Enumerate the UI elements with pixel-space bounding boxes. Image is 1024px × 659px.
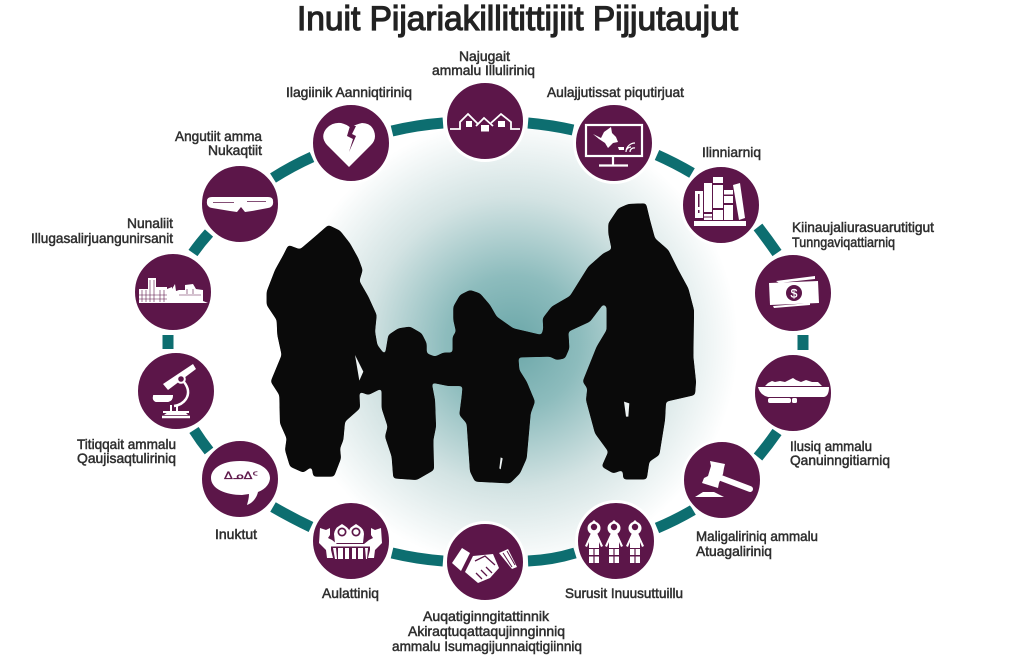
node: Nunaliit Illugasalirjuangunirsanit: [134, 252, 212, 332]
icon: banknotes: $: [791, 286, 798, 300]
label: Auqatiginngitattinnik: Auqatiginngitattinnik: [423, 608, 550, 624]
label: Inuktut: Inuktut: [215, 526, 257, 542]
icon: people around a table: [319, 524, 382, 559]
icon: broken heart: [323, 123, 375, 167]
node: Najugait ammalu Illuliriniq: [446, 82, 524, 160]
ring connectors: [168, 123, 803, 561]
background glow: [288, 118, 738, 568]
node: Aulattiniq: [312, 502, 390, 580]
node: Aulajjutissat piqutirjuat: [574, 104, 654, 182]
icon: monitor with map: [586, 125, 642, 166]
label: Kiinaujaliurasuarutitigut: Kiinaujaliurasuarutitigut: [792, 219, 934, 235]
label: ammalu Illuliriniq: ammalu Illuliriniq: [432, 62, 535, 78]
label: Titiqqait ammalu: Titiqqait ammalu: [77, 436, 176, 452]
label: Illugasalirjuangunirsanit: Illugasalirjuangunirsanit: [31, 230, 173, 246]
label: Qaujisaqtuliriniq: Qaujisaqtuliriniq: [77, 450, 176, 466]
node: Kiinaujaliurasuarutitigut Tunngaviqattiarniq: [754, 254, 832, 332]
icon: speech bubble with syllabics: ᐃᓄᐃᑦ: [224, 471, 258, 482]
label: Aulajjutissat piqutirjuat: Aulajjutissat piqutirjuat: [547, 84, 684, 100]
icon: houses: [450, 114, 520, 132]
label: Nunaliit: Nunaliit: [127, 215, 173, 231]
node: Ilinniarniq: [682, 166, 760, 244]
node: Ilusiq ammalu Qanuinngitiarniq: [754, 354, 832, 432]
icon: microscope: [154, 364, 196, 417]
node: Inuktut: [200, 440, 280, 518]
icon: handshake: [452, 548, 517, 583]
node: Auqatiginngitattinnik Akiraqtuqattaqujinnginniq ammalu Isumagijunnaiqtigiinniq: [446, 522, 524, 602]
label: Ilusiq ammalu: Ilusiq ammalu: [790, 438, 872, 454]
icon: town skyline: [139, 278, 208, 303]
label: Ilagiinik Aanniqtiriniq: Ilagiinik Aanniqtiriniq: [286, 84, 412, 100]
label: Qanuinngitiarniq: Qanuinngitiarniq: [790, 452, 890, 468]
node: Surusit Inuusuttuillu: [576, 502, 656, 580]
label: Maligaliriniq ammalu: Maligaliriniq ammalu: [696, 528, 818, 544]
label: Nukaqtiit: Nukaqtiit: [208, 142, 262, 158]
node: Maligaliriniq ammalu Atuagaliriniq: [682, 440, 762, 520]
label: Ilinniarniq: Ilinniarniq: [702, 144, 761, 160]
icon: boat: [758, 378, 829, 403]
label: Akiraqtuqattaqujinnginniq: Akiraqtuqattaqujinnginniq: [408, 623, 565, 639]
family silhouette: [267, 203, 696, 483]
label: Aulattiniq: Aulattiniq: [322, 585, 379, 601]
label: ammalu Isumagijunnaiqtigiinniq: ammalu Isumagijunnaiqtigiinniq: [392, 638, 582, 654]
icon: gavel: [695, 461, 750, 497]
label: Angutiit amma: Angutiit amma: [175, 128, 262, 144]
icon: three children: [585, 520, 644, 563]
label: Najugait: Najugait: [459, 48, 510, 64]
title: Inuit Pijariakillitittijiit Pijjutaujut: [297, 0, 739, 38]
icon: books: [694, 177, 746, 226]
node: Titiqqait ammalu Qaujisaqtuliriniq: [136, 352, 216, 430]
node: Angutiit amma Nukaqtiit: [200, 164, 280, 244]
label: Tunngaviqattiarniq: Tunngaviqattiarniq: [792, 234, 895, 250]
label: Atuagaliriniq: Atuagaliriniq: [696, 543, 772, 559]
icon: snow goggles: [207, 197, 273, 212]
node: Ilagiinik Aanniqtiriniq: [312, 104, 390, 182]
label: Surusit Inuusuttuillu: Surusit Inuusuttuillu: [565, 585, 683, 601]
